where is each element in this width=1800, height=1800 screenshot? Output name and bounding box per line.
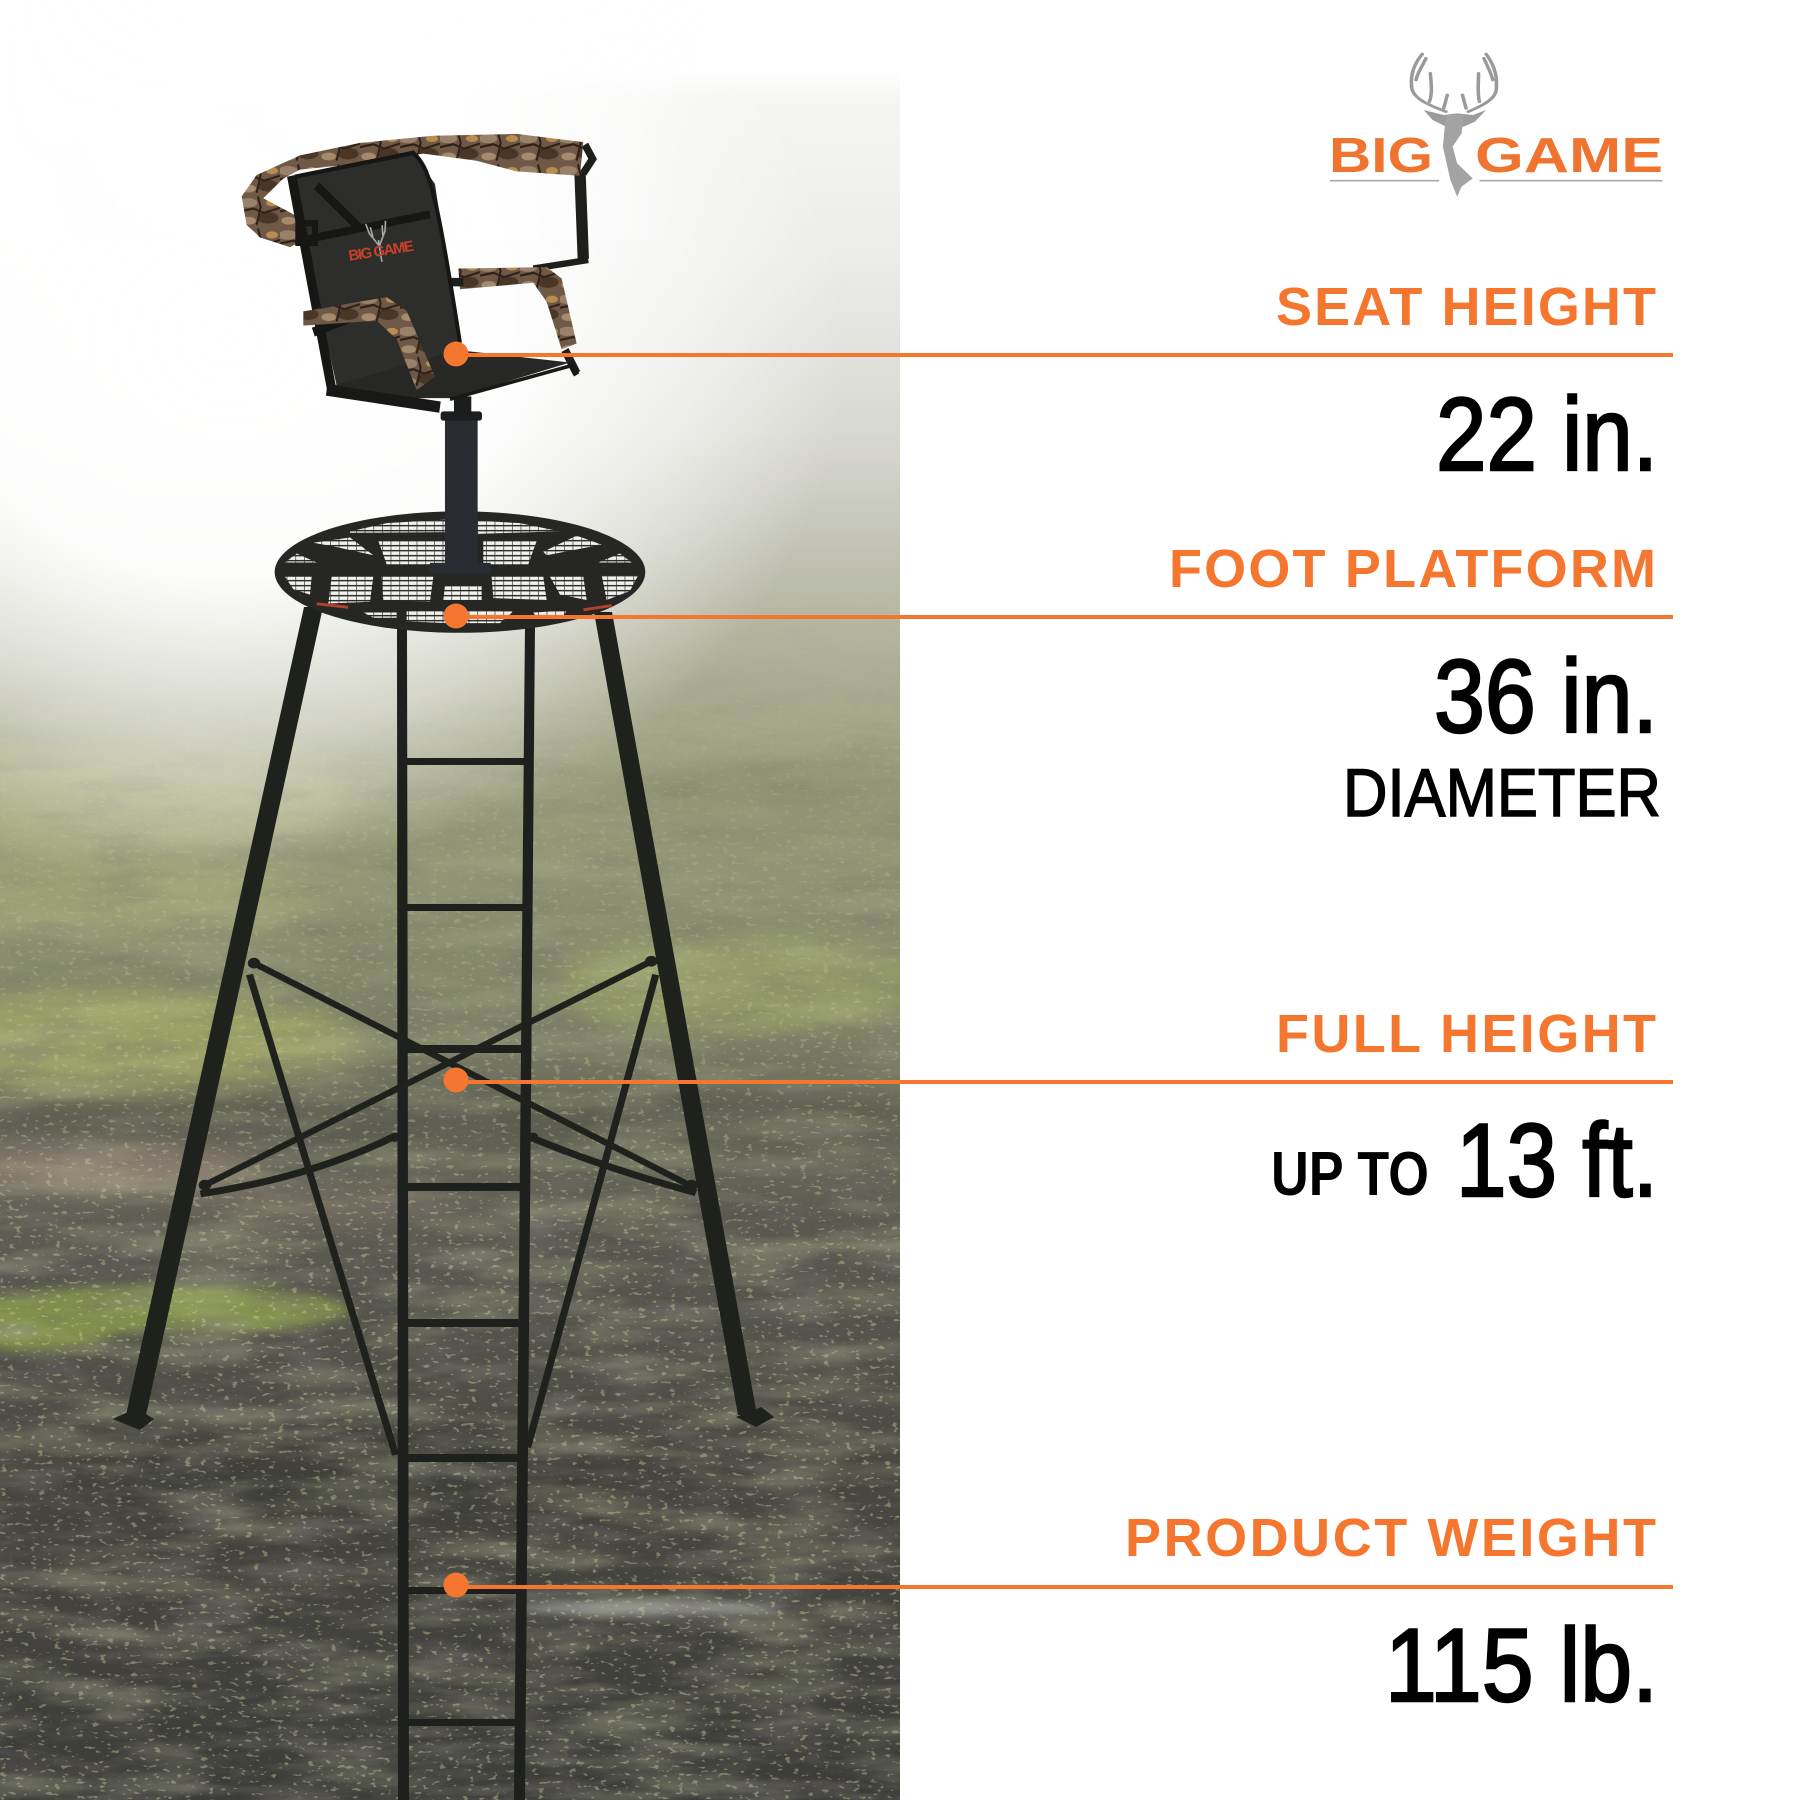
cross braces bbox=[199, 956, 698, 1455]
right camo armrest bbox=[458, 267, 577, 349]
right arm frame bbox=[452, 282, 577, 373]
mottled texture bbox=[0, 758, 900, 1800]
diameter note: DIAMETER bbox=[1343, 755, 1661, 831]
camo top rail bbox=[242, 134, 583, 247]
grass and soil bands bbox=[0, 745, 970, 1615]
seat back logo bbox=[344, 217, 415, 267]
logo wordmark: BIG bbox=[1329, 129, 1433, 183]
callout: full height bbox=[444, 1004, 1673, 1219]
callout: foot platform bbox=[444, 539, 1673, 831]
shooting rail support bbox=[533, 145, 593, 269]
tripod stand tower bbox=[113, 607, 774, 1800]
seat pan bbox=[333, 350, 570, 398]
logo wordmark: GAME bbox=[1475, 129, 1663, 183]
full height value: 13 ft. bbox=[1456, 1103, 1658, 1219]
callout: product weight bbox=[444, 1508, 1673, 1724]
up to prefix: UP TO bbox=[1271, 1140, 1429, 1209]
photo background: misty field bbox=[0, 0, 970, 1800]
seat height value: 22 in. bbox=[1436, 377, 1658, 493]
seat back logo: BIG GAME bbox=[347, 238, 415, 265]
full height label: FULL HEIGHT bbox=[1276, 1004, 1656, 1064]
callout: seat height bbox=[444, 277, 1673, 493]
top-left fade to white bbox=[0, 0, 700, 240]
small antlers bbox=[366, 221, 392, 263]
logo wordmark bbox=[1329, 129, 1663, 183]
product weight label: PRODUCT WEIGHT bbox=[1125, 1508, 1656, 1568]
ladder bbox=[397, 625, 535, 1800]
seat post bbox=[430, 396, 491, 574]
foot platform value: 36 in. bbox=[1434, 639, 1658, 755]
platform mesh openings bbox=[285, 520, 638, 623]
product weight value: 115 lb. bbox=[1385, 1608, 1658, 1724]
legs and feet bbox=[113, 607, 774, 1430]
Big Game logo bbox=[1329, 54, 1663, 197]
foot platform bbox=[275, 511, 645, 633]
left camo armrest bbox=[303, 297, 435, 390]
fog overlay bbox=[0, 153, 780, 852]
icon: deer head and antlers bbox=[1330, 54, 1662, 197]
seat back bbox=[295, 154, 459, 386]
foot platform label: FOOT PLATFORM bbox=[1169, 539, 1656, 599]
seat assembly bbox=[242, 134, 593, 574]
seat height label: SEAT HEIGHT bbox=[1276, 277, 1656, 337]
